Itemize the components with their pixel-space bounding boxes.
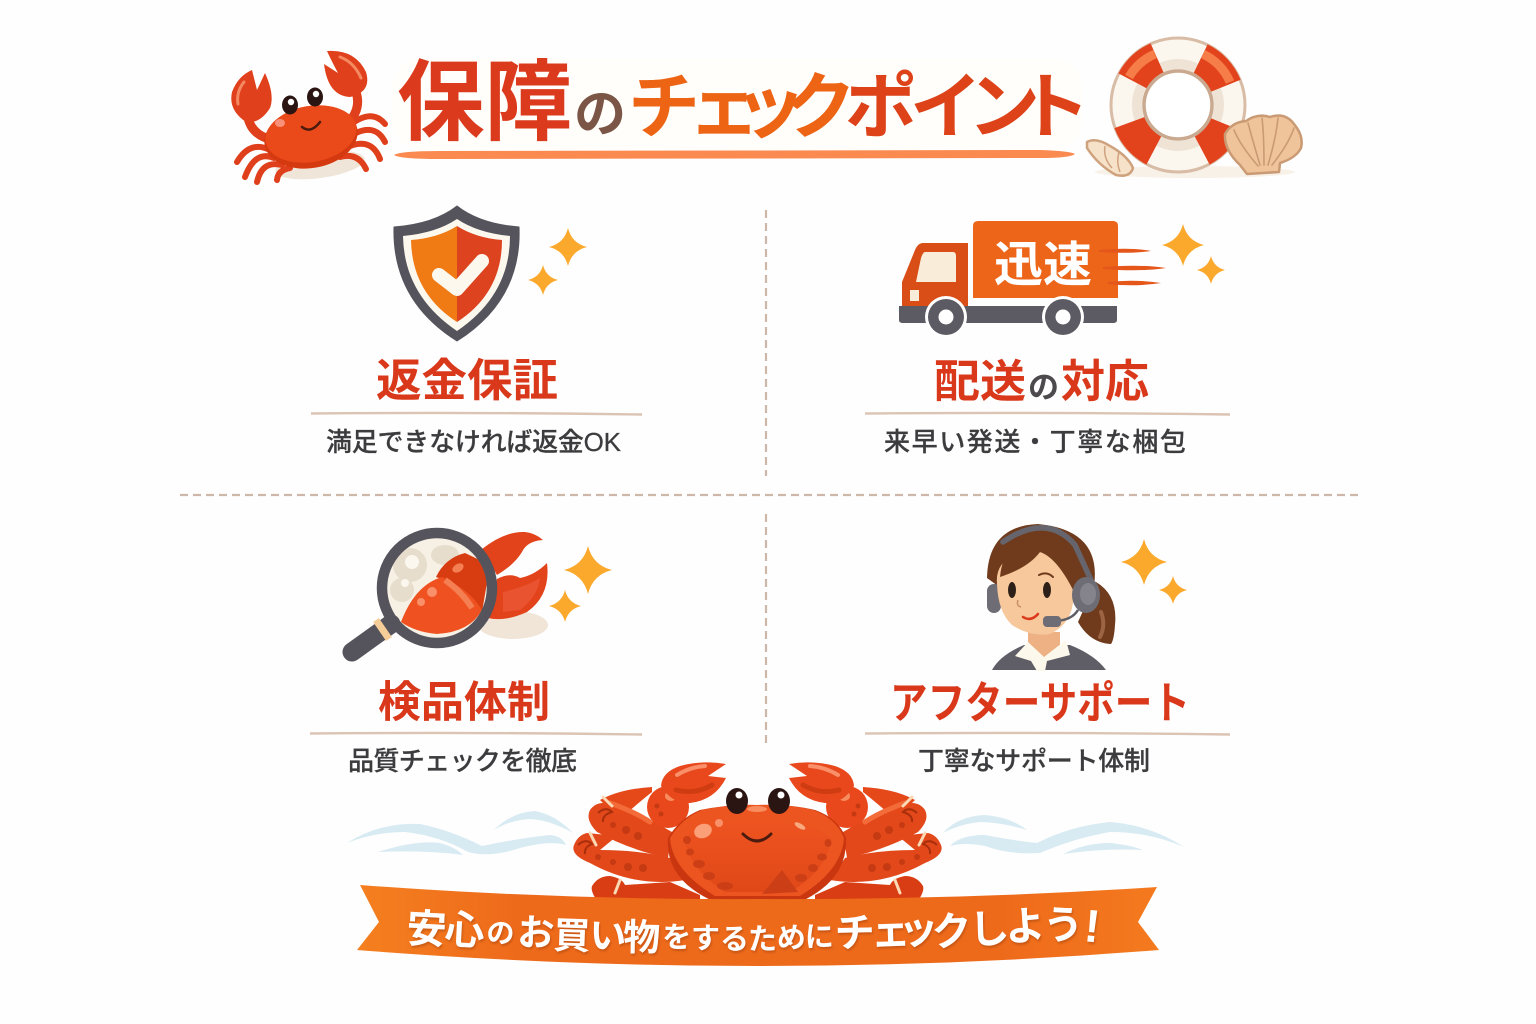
left limbs — [573, 762, 726, 905]
speed lines — [1099, 249, 1166, 285]
divider — [311, 413, 642, 414]
panel: inspection — [310, 530, 642, 776]
ribbon banner — [357, 885, 1159, 966]
heading — [934, 356, 1149, 407]
icon: shield — [394, 206, 519, 341]
divider — [310, 733, 642, 734]
icon: magnifier over crab claw — [352, 530, 548, 652]
icon: sparkles — [1121, 539, 1187, 604]
ribbon text: ! — [1082, 899, 1103, 953]
heading: 検品体制 — [378, 679, 550, 727]
heading: 配送 — [934, 356, 1026, 407]
icon: sparkles — [549, 546, 612, 622]
grid dividers — [180, 210, 1358, 744]
title banner — [392, 53, 1090, 159]
ribbon text: 安心 — [406, 907, 486, 954]
description: 来早い発送・丁寧な梱包 — [884, 427, 1186, 457]
panel: after support — [865, 524, 1230, 776]
ribbon text: しよう — [968, 903, 1084, 953]
title text: の — [574, 86, 626, 144]
heading: 対応 — [1061, 356, 1149, 407]
carapace — [668, 788, 846, 902]
ribbon text: チェック — [834, 908, 972, 956]
description: 品質チェックを徹底 — [348, 746, 577, 776]
icon: delivery truck — [899, 221, 1166, 338]
truck label: 迅速 — [994, 239, 1092, 292]
divider — [865, 733, 1230, 734]
heading: アフターサポート — [890, 679, 1190, 728]
icon: small crab — [231, 51, 385, 184]
title text — [397, 53, 1090, 152]
ribbon text: の — [486, 917, 515, 949]
ribbon text: お買い物 — [517, 912, 661, 959]
icon: support operator — [987, 524, 1115, 671]
description: 丁寧なサポート体制 — [918, 746, 1150, 776]
decoration: right waves — [943, 815, 1184, 854]
divider — [865, 413, 1230, 414]
icon: sparkles — [1162, 224, 1225, 284]
decoration: left waves — [347, 811, 573, 855]
illustration: large crab — [573, 762, 942, 905]
ribbon text: をするために — [662, 921, 834, 956]
icon: sparkles — [528, 228, 587, 295]
title text: 保障 — [397, 53, 572, 152]
icon: spiral shell — [1087, 140, 1133, 176]
icon: scallop shell — [1225, 116, 1302, 174]
right limbs — [789, 762, 942, 905]
panel: delivery — [865, 221, 1230, 457]
description: 満足できなければ返金OK — [326, 427, 622, 457]
ribbon text — [406, 899, 1103, 959]
heading: の — [1028, 370, 1059, 405]
title text: チェック — [628, 68, 856, 148]
panel: money-back guarantee — [311, 206, 642, 457]
icon: life ring and shells — [1087, 38, 1302, 178]
heading: 返金保証 — [376, 355, 558, 406]
title underline — [394, 150, 1075, 159]
title text: ポイント — [845, 68, 1090, 148]
